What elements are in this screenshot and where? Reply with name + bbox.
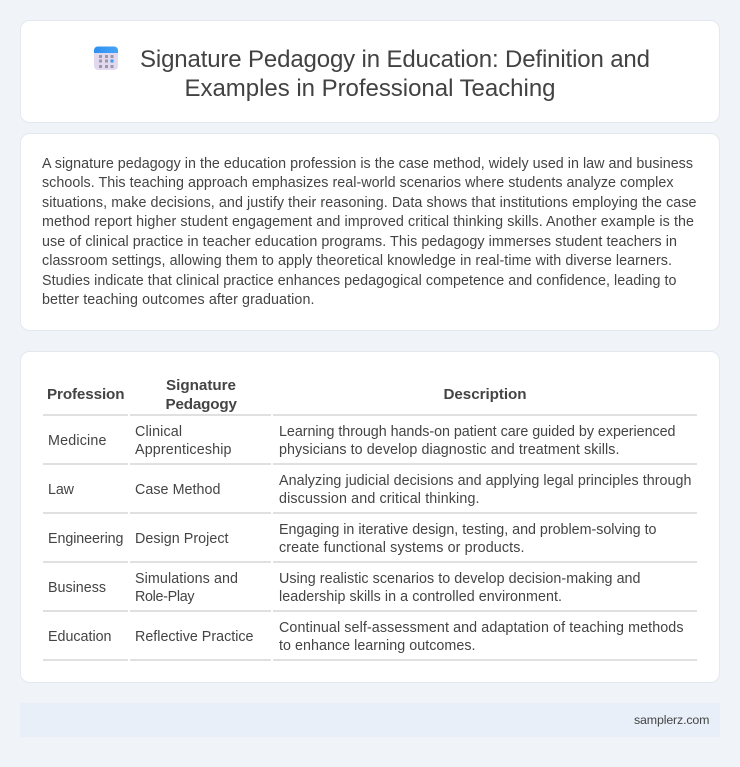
table row: Medicine: Clinical xyxy=(135,424,182,440)
panel: title card xyxy=(20,20,720,122)
table row: Business: Using realistic scenarios to develop decision-making and xyxy=(279,571,641,587)
table row: Law: Analyzing judicial decisions and applying legal principles through xyxy=(279,473,692,489)
table row: Engineering: Design Project xyxy=(135,531,229,547)
table row: Business: Business xyxy=(48,580,106,596)
table header: Description xyxy=(444,386,526,403)
table row: Law: discussion and critical thinking. xyxy=(279,491,480,507)
text block: intro: schools. This teaching approach emphasizes real-world scenarios where students analyze complex xyxy=(42,175,674,191)
table row: Education: Reflective Practice xyxy=(135,629,254,645)
title: Examples in Professional Teaching xyxy=(184,75,556,102)
table row: Education: Continual self-assessment and adaptation of teaching methods xyxy=(279,620,684,636)
table row: Education xyxy=(43,620,697,661)
footer bar xyxy=(20,703,720,737)
table header xyxy=(43,377,697,416)
table row: Law xyxy=(43,473,697,514)
table row: Business: Simulations and xyxy=(135,571,238,587)
table header: Profession xyxy=(47,386,124,403)
table row: Medicine: physicians to develop diagnostic and treatment skills. xyxy=(279,442,620,458)
panel: intro paragraph xyxy=(20,134,720,330)
table row: Medicine: Learning through hands-on patient care guided by experienced xyxy=(279,424,676,440)
table row: Engineering: Engaging in iterative design, testing, and problem-solving to xyxy=(279,522,657,538)
title: Signature Pedagogy in Education: Definition and xyxy=(140,46,650,73)
text block: intro: A signature pedagogy in the education profession is the case method, widely used in law and business xyxy=(42,156,693,172)
table row: Education: to enhance learning outcomes. xyxy=(279,638,476,654)
table row: Law: Case Method xyxy=(135,482,221,498)
table row: Engineering: Engineering xyxy=(48,531,124,547)
text block: intro: classroom settings, allowing them to apply theoretical knowledge in real-time with diverse learners. xyxy=(42,253,672,269)
title xyxy=(140,46,650,102)
table row: Education: Education xyxy=(48,629,112,645)
table header: Pedagogy xyxy=(166,396,238,413)
table row: Engineering: create functional systems or products. xyxy=(279,540,524,556)
text block: intro: situations, make decisions, and justify their reasoning. Data shows that institutions employing the case xyxy=(42,195,697,211)
table row: Business: Role-Play xyxy=(135,589,195,605)
table row: Medicine: Medicine xyxy=(48,433,107,449)
panel: table card xyxy=(20,352,720,682)
table row: Business xyxy=(43,571,697,612)
table row: Law: Law xyxy=(48,482,75,498)
table row: Business: leadership skills in a controlled environment. xyxy=(279,589,562,605)
table row: Medicine: Apprenticeship xyxy=(135,442,232,458)
icon: calendar xyxy=(94,46,118,70)
text block: intro xyxy=(42,156,697,308)
footer text: samplerz.com xyxy=(634,713,710,727)
table row: Medicine xyxy=(43,424,697,465)
text block: intro: method report higher student engagement and improved critical thinking skills. Another example is the xyxy=(42,214,694,230)
table row: Engineering xyxy=(43,522,697,563)
table header: Signature xyxy=(166,377,236,394)
text block: intro: Studies indicate that clinical practice enhances pedagogical competence and confidence, leading to xyxy=(42,273,677,289)
text block: intro: better teaching outcomes after graduation. xyxy=(42,292,314,308)
text block: intro: use of clinical practice in teacher education programs. This pedagogy immerses student teachers in xyxy=(42,234,677,250)
